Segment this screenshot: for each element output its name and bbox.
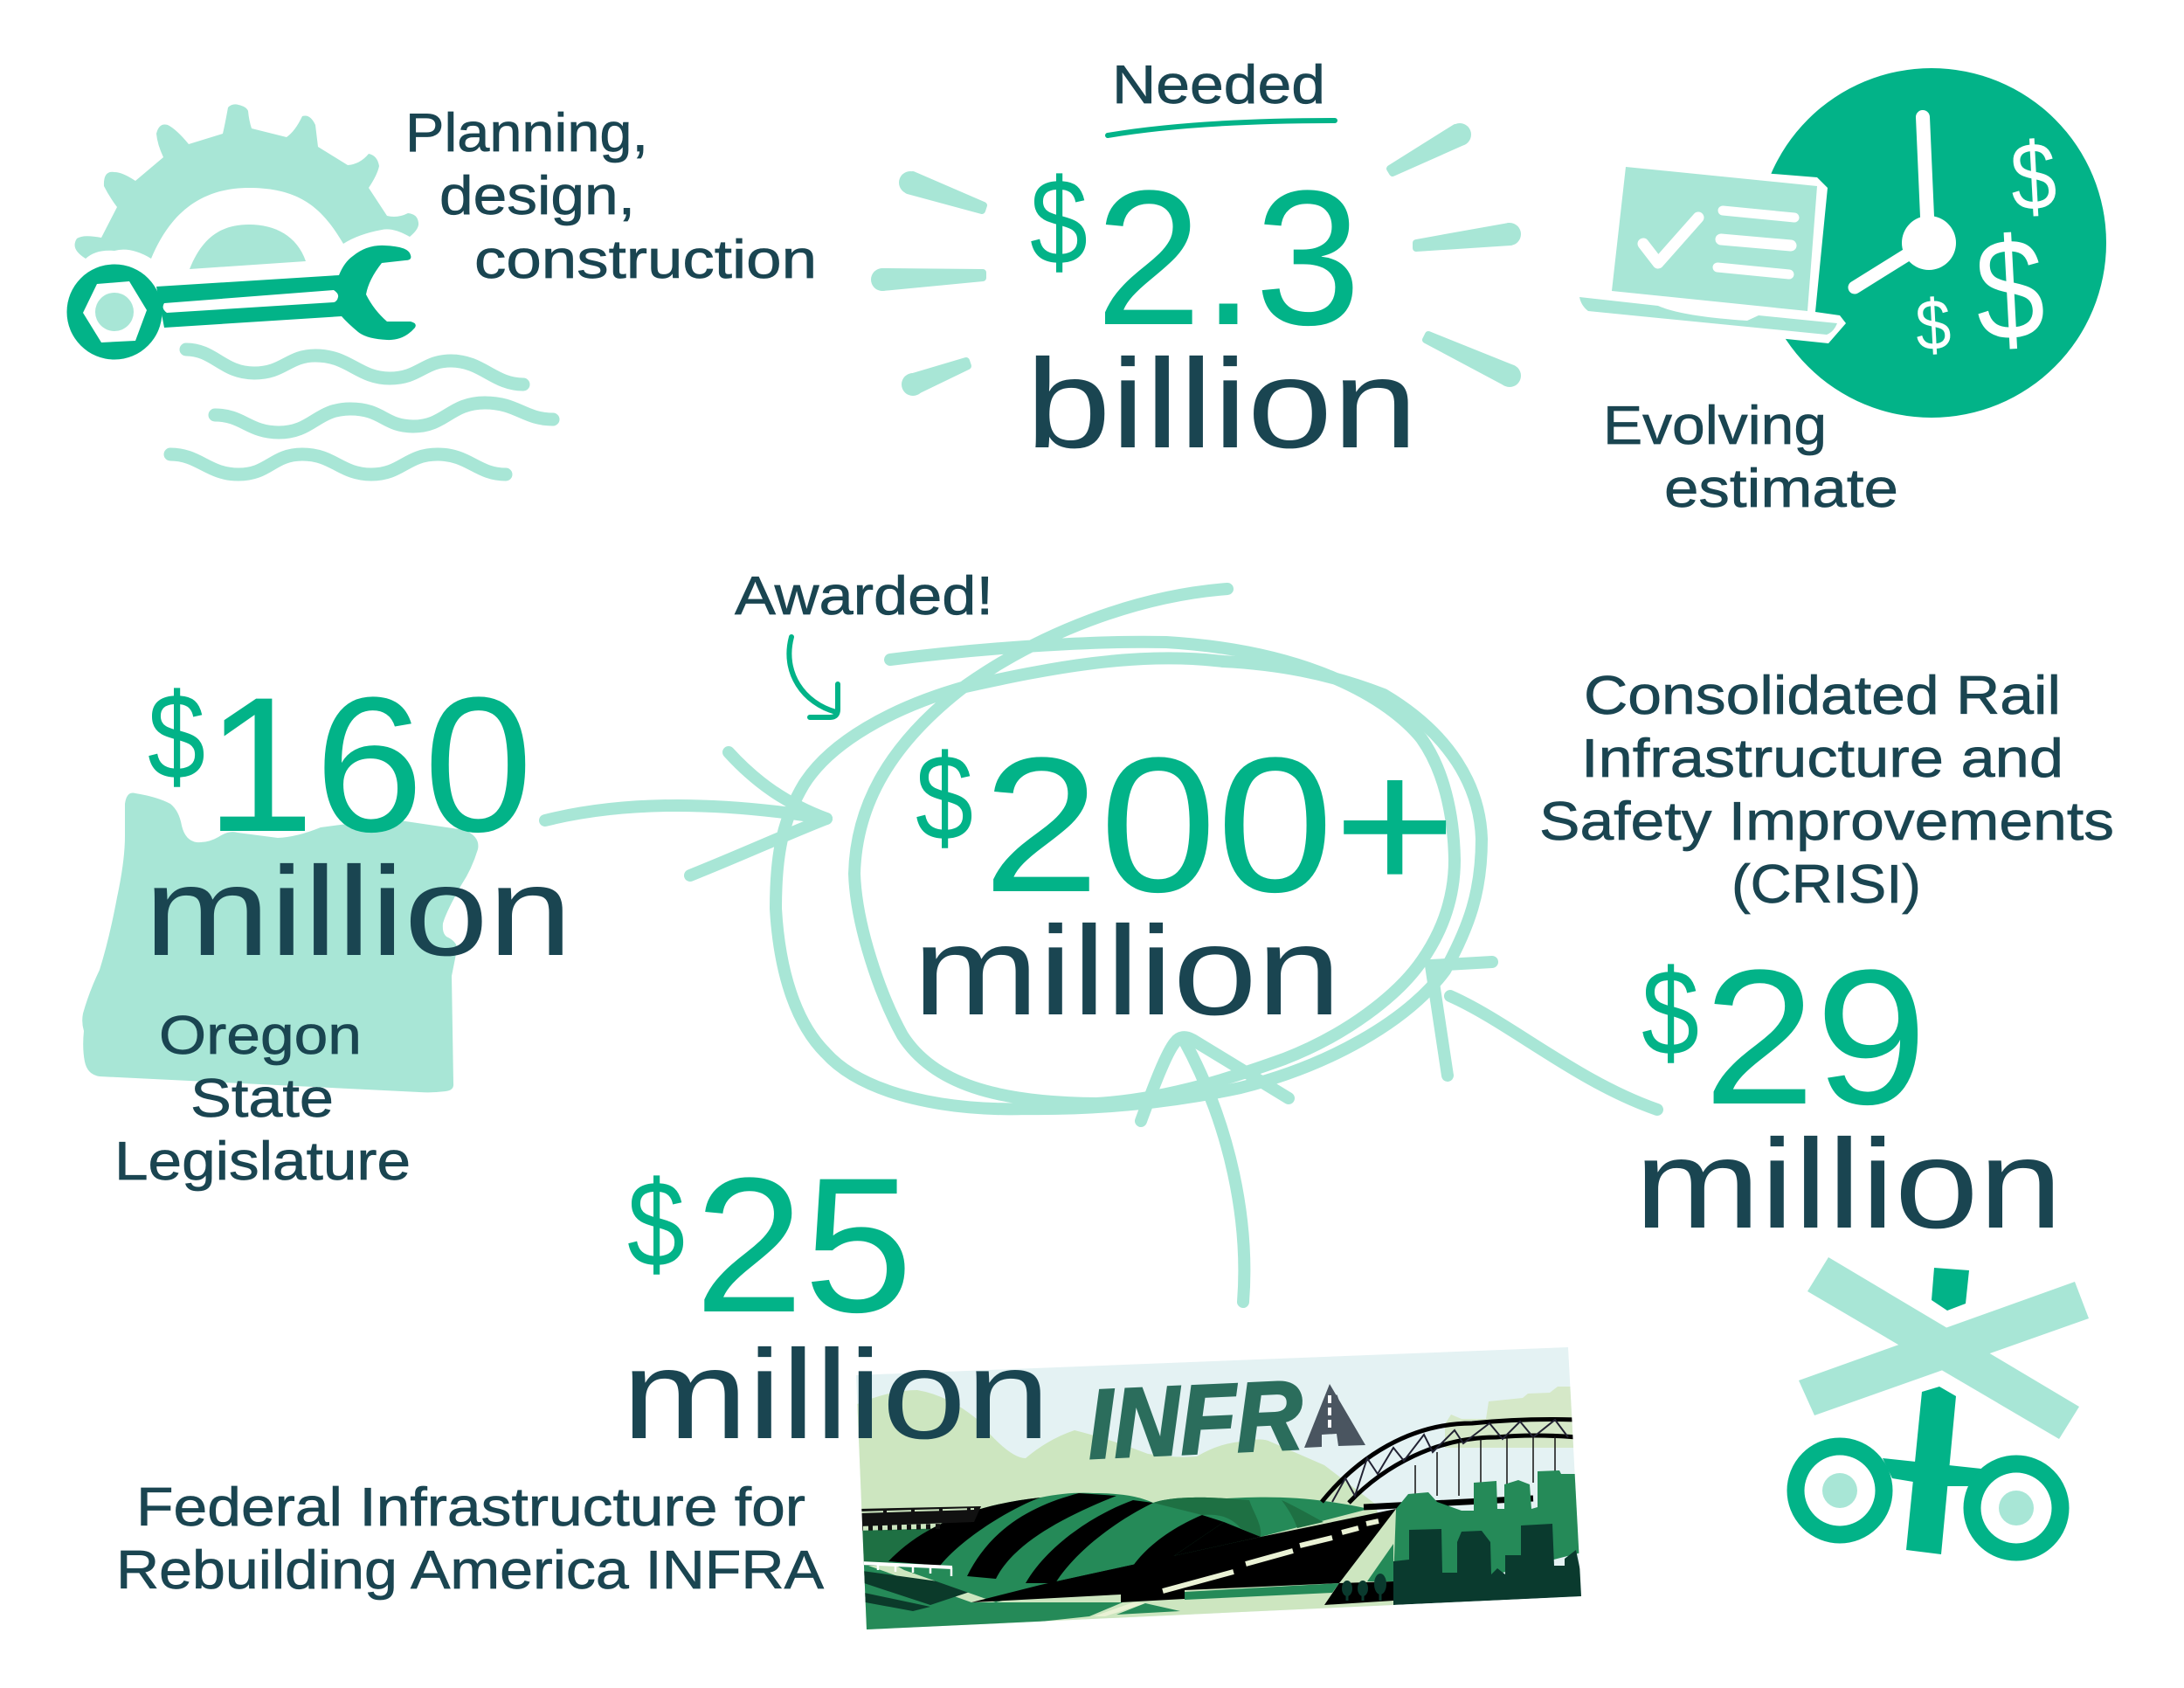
text: oregon state legislature: Oregon bbox=[159, 1006, 362, 1066]
amount: 29 million: million bbox=[1635, 1113, 2063, 1255]
text: crisi program: Consolidated Rail bbox=[1584, 666, 2061, 726]
amount: 2.3 billion: $ bbox=[1030, 153, 1088, 290]
amount: 160 million: 160 bbox=[205, 657, 533, 872]
text: crisi program bbox=[1539, 666, 2114, 915]
icon: clock, money and laptop bbox=[1579, 68, 2106, 418]
amount: 25 million: $ bbox=[627, 1155, 685, 1292]
icon: clock, money and laptop: $ bbox=[1914, 285, 1952, 366]
amount: 2.3 billion: billion bbox=[1026, 333, 1418, 474]
icon: gear and wrench over water bbox=[66, 104, 553, 474]
text: oregon state legislature: Legislature bbox=[114, 1131, 411, 1192]
underline bbox=[1108, 121, 1335, 135]
amount: 160 million bbox=[144, 657, 572, 982]
arrow: from oregon bbox=[545, 752, 826, 875]
icon: clock, money and laptop: $ bbox=[2008, 122, 2059, 232]
illustration: INFRA landscape bbox=[856, 1347, 1581, 1629]
amount: 200+ million: million bbox=[913, 900, 1341, 1041]
text: federal infra program: Federal Infrastructure for bbox=[136, 1477, 805, 1538]
logo: INFRA bbox=[1089, 1380, 1365, 1459]
amount: 29 million: $ bbox=[1641, 944, 1699, 1081]
panel: planning, design, construction bbox=[66, 103, 817, 474]
icon: clock, money and laptop: $ bbox=[1972, 207, 2048, 371]
panel: awarded total bbox=[735, 566, 1482, 1109]
amount: 29 million bbox=[1635, 930, 2063, 1255]
amount: 25 million: million bbox=[622, 1324, 1050, 1465]
panel: oregon state legislature bbox=[82, 657, 572, 1192]
text: planning, design, construction: Planning, bbox=[405, 103, 648, 163]
logo: INFRA: INFR bbox=[1085, 1360, 1305, 1479]
text: oregon state legislature bbox=[114, 1006, 411, 1192]
arrow: from INFRA bbox=[1141, 1037, 1289, 1302]
text: oregon state legislature: State bbox=[190, 1069, 334, 1129]
amount: 200+ million: 200+ bbox=[983, 717, 1456, 932]
text: planning, design, construction: construction bbox=[474, 230, 817, 290]
amount: 2.3 billion: 2.3 bbox=[1095, 150, 1361, 365]
text: federal infra program: Rebuilding America INFRA bbox=[116, 1540, 825, 1601]
arrow: from CRISI bbox=[1431, 962, 1657, 1110]
text: federal infra program bbox=[116, 1477, 825, 1601]
scribbled circle bbox=[776, 589, 1482, 1109]
panel: needed total bbox=[871, 55, 1521, 474]
text: crisi program: Safety Improvements bbox=[1539, 792, 2114, 852]
text: crisi program: Infrastructure and bbox=[1581, 729, 2063, 789]
amount: 29 million: 29 bbox=[1704, 930, 1927, 1145]
text: planning, design, construction: design, bbox=[439, 166, 635, 226]
text: evolving estimate: estimate bbox=[1664, 459, 1898, 519]
panel: CRISI bbox=[1539, 666, 2114, 1554]
arrow: awarded bbox=[789, 637, 838, 717]
text: evolving estimate bbox=[1603, 396, 1898, 519]
text: evolving estimate: Evolving bbox=[1603, 396, 1827, 456]
rays around amount bbox=[871, 123, 1521, 396]
amount: 200+ million bbox=[913, 717, 1456, 1041]
panel: federal INFRA bbox=[121, 1175, 1581, 1629]
label: awarded: Awarded! bbox=[735, 566, 993, 626]
amount: 25 million: 25 bbox=[695, 1138, 913, 1352]
icon: rail crossing bbox=[1796, 1257, 2089, 1554]
logo: INFRA: A bbox=[1307, 1380, 1356, 1460]
icon: oregon map bbox=[82, 793, 478, 1092]
amount: 160 million: million bbox=[144, 841, 572, 982]
panel: evolving estimate bbox=[1579, 68, 2106, 519]
amount: 160 million: $ bbox=[148, 668, 205, 805]
amount: 25 million bbox=[622, 1138, 1050, 1465]
text: planning, design, construction bbox=[405, 103, 817, 290]
amount: 200+ million: $ bbox=[916, 729, 973, 866]
text: crisi program: (CRISI) bbox=[1731, 854, 1921, 915]
amount: 2.3 billion bbox=[1026, 150, 1418, 474]
heading: needed: Needed bbox=[1112, 55, 1325, 115]
